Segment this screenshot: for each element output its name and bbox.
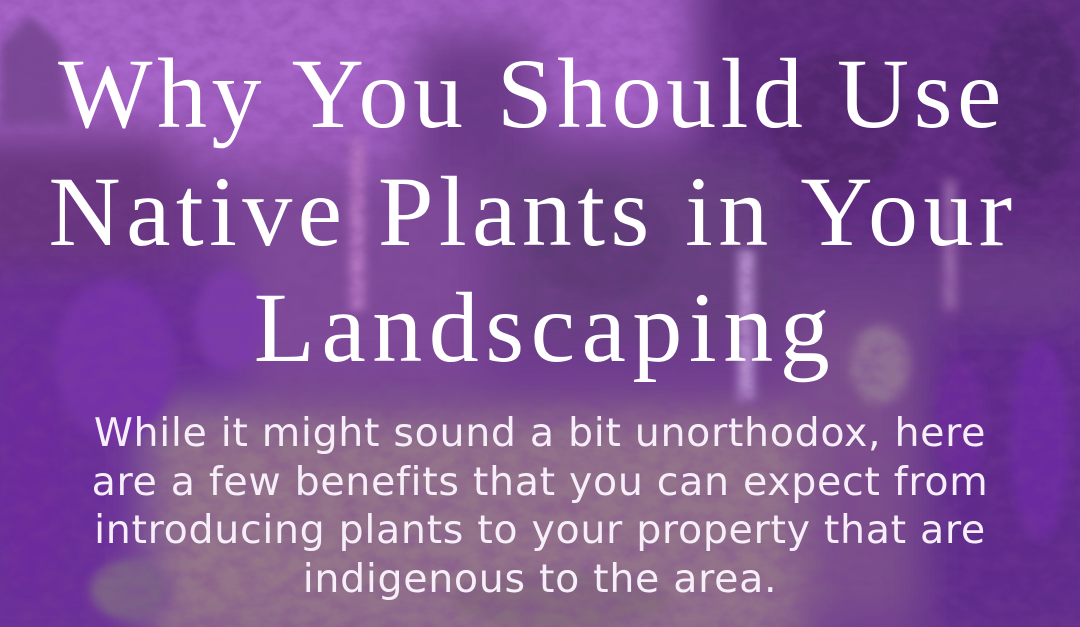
title	[48, 38, 1018, 383]
intro text: indigenous to the area.	[303, 556, 777, 602]
intro text	[92, 410, 988, 602]
title line 2: Native Plants in Your	[48, 156, 1018, 267]
intro text: introducing plants to your property that are	[94, 507, 986, 553]
intro text: are a few benefits that you can expect from	[92, 459, 988, 505]
intro text: While it might sound a bit unorthodox, here	[94, 410, 986, 456]
title line 3: Landscaping	[254, 272, 836, 383]
title line 1: Why You Should Use	[58, 38, 1006, 149]
